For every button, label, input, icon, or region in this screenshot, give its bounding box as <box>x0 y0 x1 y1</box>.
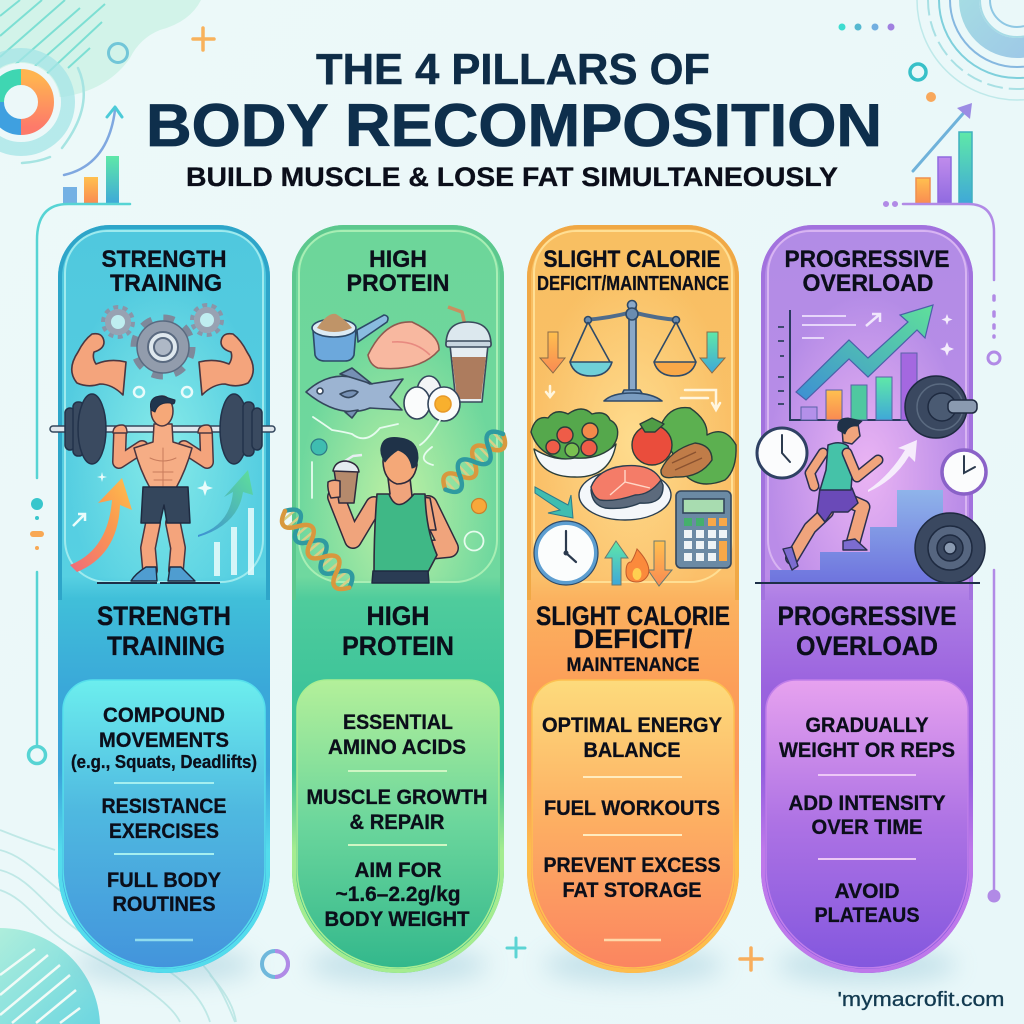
icon: DNA helix left <box>277 504 357 594</box>
bullet: resistance exercises: EXERCISES <box>109 820 219 843</box>
icon: weight plate upper <box>905 376 977 438</box>
heading below illustration: HIGH <box>366 601 430 631</box>
bullet: prevent excess fat storage <box>544 854 720 902</box>
heading: strength training: STRENGTH <box>102 246 226 273</box>
panel: high protein <box>277 225 510 973</box>
bullet: muscle growth and repair <box>306 786 488 834</box>
bullet: muscle growth and repair: & REPAIR <box>350 811 444 834</box>
bullet: compound movements: (e.g., Squats, Deadlifts) <box>71 752 257 772</box>
bullet: protein target: BODY WEIGHT <box>324 908 470 931</box>
title block <box>146 45 882 192</box>
decoration: bottom-left waves and circle <box>0 830 288 1024</box>
bullet: full body routines: FULL BODY <box>107 869 221 892</box>
bullet: gradually weight or reps <box>779 714 955 762</box>
bullet: resistance exercises <box>102 795 226 843</box>
panel: slight calorie deficit <box>527 225 739 973</box>
bullet: essential amino acids: AMINO ACIDS <box>328 736 466 759</box>
icon: molecule dots <box>311 439 486 550</box>
panel: strength training <box>50 225 275 973</box>
heading below illustration: PROGRESSIVE <box>778 601 956 631</box>
decoration: top-right rings and dots <box>838 0 1024 102</box>
text panel: progressive overload <box>763 601 971 971</box>
text panel: high protein <box>294 601 502 971</box>
illustration: lifter <box>113 396 212 581</box>
icon: small rings <box>134 387 192 397</box>
icon: protein scoop <box>312 314 388 361</box>
bullet: optimal energy balance <box>542 714 722 762</box>
icon: salad bowl <box>531 409 618 477</box>
icon: salmon plate <box>579 466 671 520</box>
bullet: fuel workouts: FUEL WORKOUTS <box>544 797 720 820</box>
icon: protein shake cup <box>446 307 491 402</box>
title line 2: BODY RECOMPOSITION <box>146 92 882 159</box>
bullet: full body routines <box>107 869 221 916</box>
heading below illustration: OVERLOAD <box>796 631 938 661</box>
icon: clock <box>534 521 598 585</box>
icon: flexed arms <box>72 334 253 395</box>
title line 1: THE 4 PILLARS OF <box>316 45 710 94</box>
icon: clock left <box>757 428 807 478</box>
heading: slight calorie deficit: DEFICIT/MAINTENANCE <box>537 273 729 295</box>
icon: DNA helix right <box>438 426 510 497</box>
decorative pathways <box>312 417 440 498</box>
bullet: muscle growth and repair: MUSCLE GROWTH <box>306 786 488 809</box>
bullet: avoid plateaus <box>814 880 920 927</box>
bullet: gradually weight or reps: WEIGHT OR REPS <box>779 739 955 762</box>
pillar shadows <box>74 947 957 983</box>
icon: barbell <box>50 394 275 464</box>
bullet: full body routines: ROUTINES <box>112 893 216 916</box>
bullet: add intensity: ADD INTENSITY <box>788 792 946 815</box>
heading below illustration <box>536 601 730 676</box>
subtitle: BUILD MUSCLE & LOSE FAT SIMULTANEOUSLY <box>186 162 838 192</box>
icon: small white arrows <box>546 386 720 410</box>
bullet: add intensity <box>788 792 946 839</box>
icon: white upward arrow <box>868 440 917 492</box>
illustration: stairs <box>770 490 943 582</box>
icon: eggs <box>404 376 460 421</box>
icon: calculator <box>676 491 731 568</box>
bullet: compound movements <box>71 704 257 772</box>
heading below illustration: MAINTENANCE <box>566 655 700 676</box>
heading below illustration: TRAINING <box>107 631 225 661</box>
decoration: bottom plus signs <box>507 938 762 970</box>
bullet: essential amino acids: ESSENTIAL <box>343 711 453 734</box>
decoration: top-left blob and donut <box>0 0 201 163</box>
decoration: right connector lines and dots <box>884 202 1000 902</box>
chart: progress bars and arrow <box>778 305 954 420</box>
heading: slight calorie deficit <box>537 246 729 295</box>
icon: fish <box>306 368 403 418</box>
heading below illustration <box>97 601 231 661</box>
bullet: prevent excess fat storage: PREVENT EXCESS <box>544 854 720 877</box>
text panel: slight calorie deficit <box>529 601 737 971</box>
ground line <box>97 582 230 584</box>
text panel: strength training <box>60 601 268 971</box>
bullet: protein target <box>324 859 470 931</box>
bullet: avoid plateaus: PLATEAUS <box>814 904 920 927</box>
icon: down arrows beside scale <box>540 332 725 373</box>
heading: slight calorie deficit: SLIGHT CALORIE <box>544 246 720 273</box>
heading: high protein: PROTEIN <box>346 270 450 297</box>
icon: orange growth arrow <box>70 478 132 572</box>
bullet: add intensity: OVER TIME <box>812 816 922 839</box>
icon: teal diagonal arrow <box>535 487 573 518</box>
bullet: optimal energy balance: BALANCE <box>584 739 680 762</box>
heading: progressive overload: PROGRESSIVE <box>784 246 950 273</box>
icon: arrows and flame <box>605 541 672 586</box>
heading below illustration: PROTEIN <box>342 631 454 661</box>
decoration: top-left plus <box>193 28 214 50</box>
heading below illustration <box>342 601 454 661</box>
bullet: protein target: ~1.6–2.2g/kg <box>336 883 460 906</box>
footer url: 'mymacrofit.com <box>838 989 1004 1011</box>
panel: progressive overload <box>755 225 986 973</box>
icon: chicken breast <box>368 322 439 369</box>
bullet: protein target: AIM FOR <box>354 859 442 882</box>
heading: high protein <box>346 246 450 297</box>
heading below illustration <box>778 601 956 661</box>
bullet: prevent excess fat storage: FAT STORAGE <box>562 879 702 902</box>
bullet: avoid plateaus: AVOID <box>834 880 900 903</box>
icon: top-right rising bar chart <box>913 103 972 204</box>
heading: progressive overload: OVERLOAD <box>802 270 934 297</box>
heading: strength training <box>102 246 226 297</box>
icon: balance scale <box>570 300 696 401</box>
illustration: man with shake <box>336 437 449 583</box>
heading: progressive overload <box>784 246 950 297</box>
bullet: essential amino acids <box>328 711 466 759</box>
heading: strength training: TRAINING <box>110 270 222 297</box>
icon: top-left rising bar chart <box>63 107 122 204</box>
heading below illustration: STRENGTH <box>97 601 231 631</box>
illustration: runner <box>783 418 878 570</box>
heading: high protein: HIGH <box>369 246 427 273</box>
heading below illustration: SLIGHT CALORIE <box>536 601 730 631</box>
bullet: gradually weight or reps: GRADUALLY <box>806 714 928 737</box>
icon: shake in hand <box>328 455 362 503</box>
heading below illustration: DEFICIT/ <box>574 624 693 654</box>
bullet: compound movements: COMPOUND <box>103 704 225 727</box>
icon: white bars and sparkles <box>73 472 254 576</box>
icon: gears <box>103 305 222 376</box>
decoration: left connector lines and dots <box>28 204 130 764</box>
bullet: optimal energy balance: OPTIMAL ENERGY <box>542 714 722 737</box>
icon: weight plate lower <box>915 513 985 583</box>
icon: green growth arrow <box>198 470 253 537</box>
bullet: resistance exercises: RESISTANCE <box>102 795 226 818</box>
bullet: compound movements: MOVEMENTS <box>99 729 229 752</box>
icon: clock right <box>942 450 986 494</box>
ground line <box>755 582 980 584</box>
icon: tomato lettuce steak <box>632 408 736 484</box>
